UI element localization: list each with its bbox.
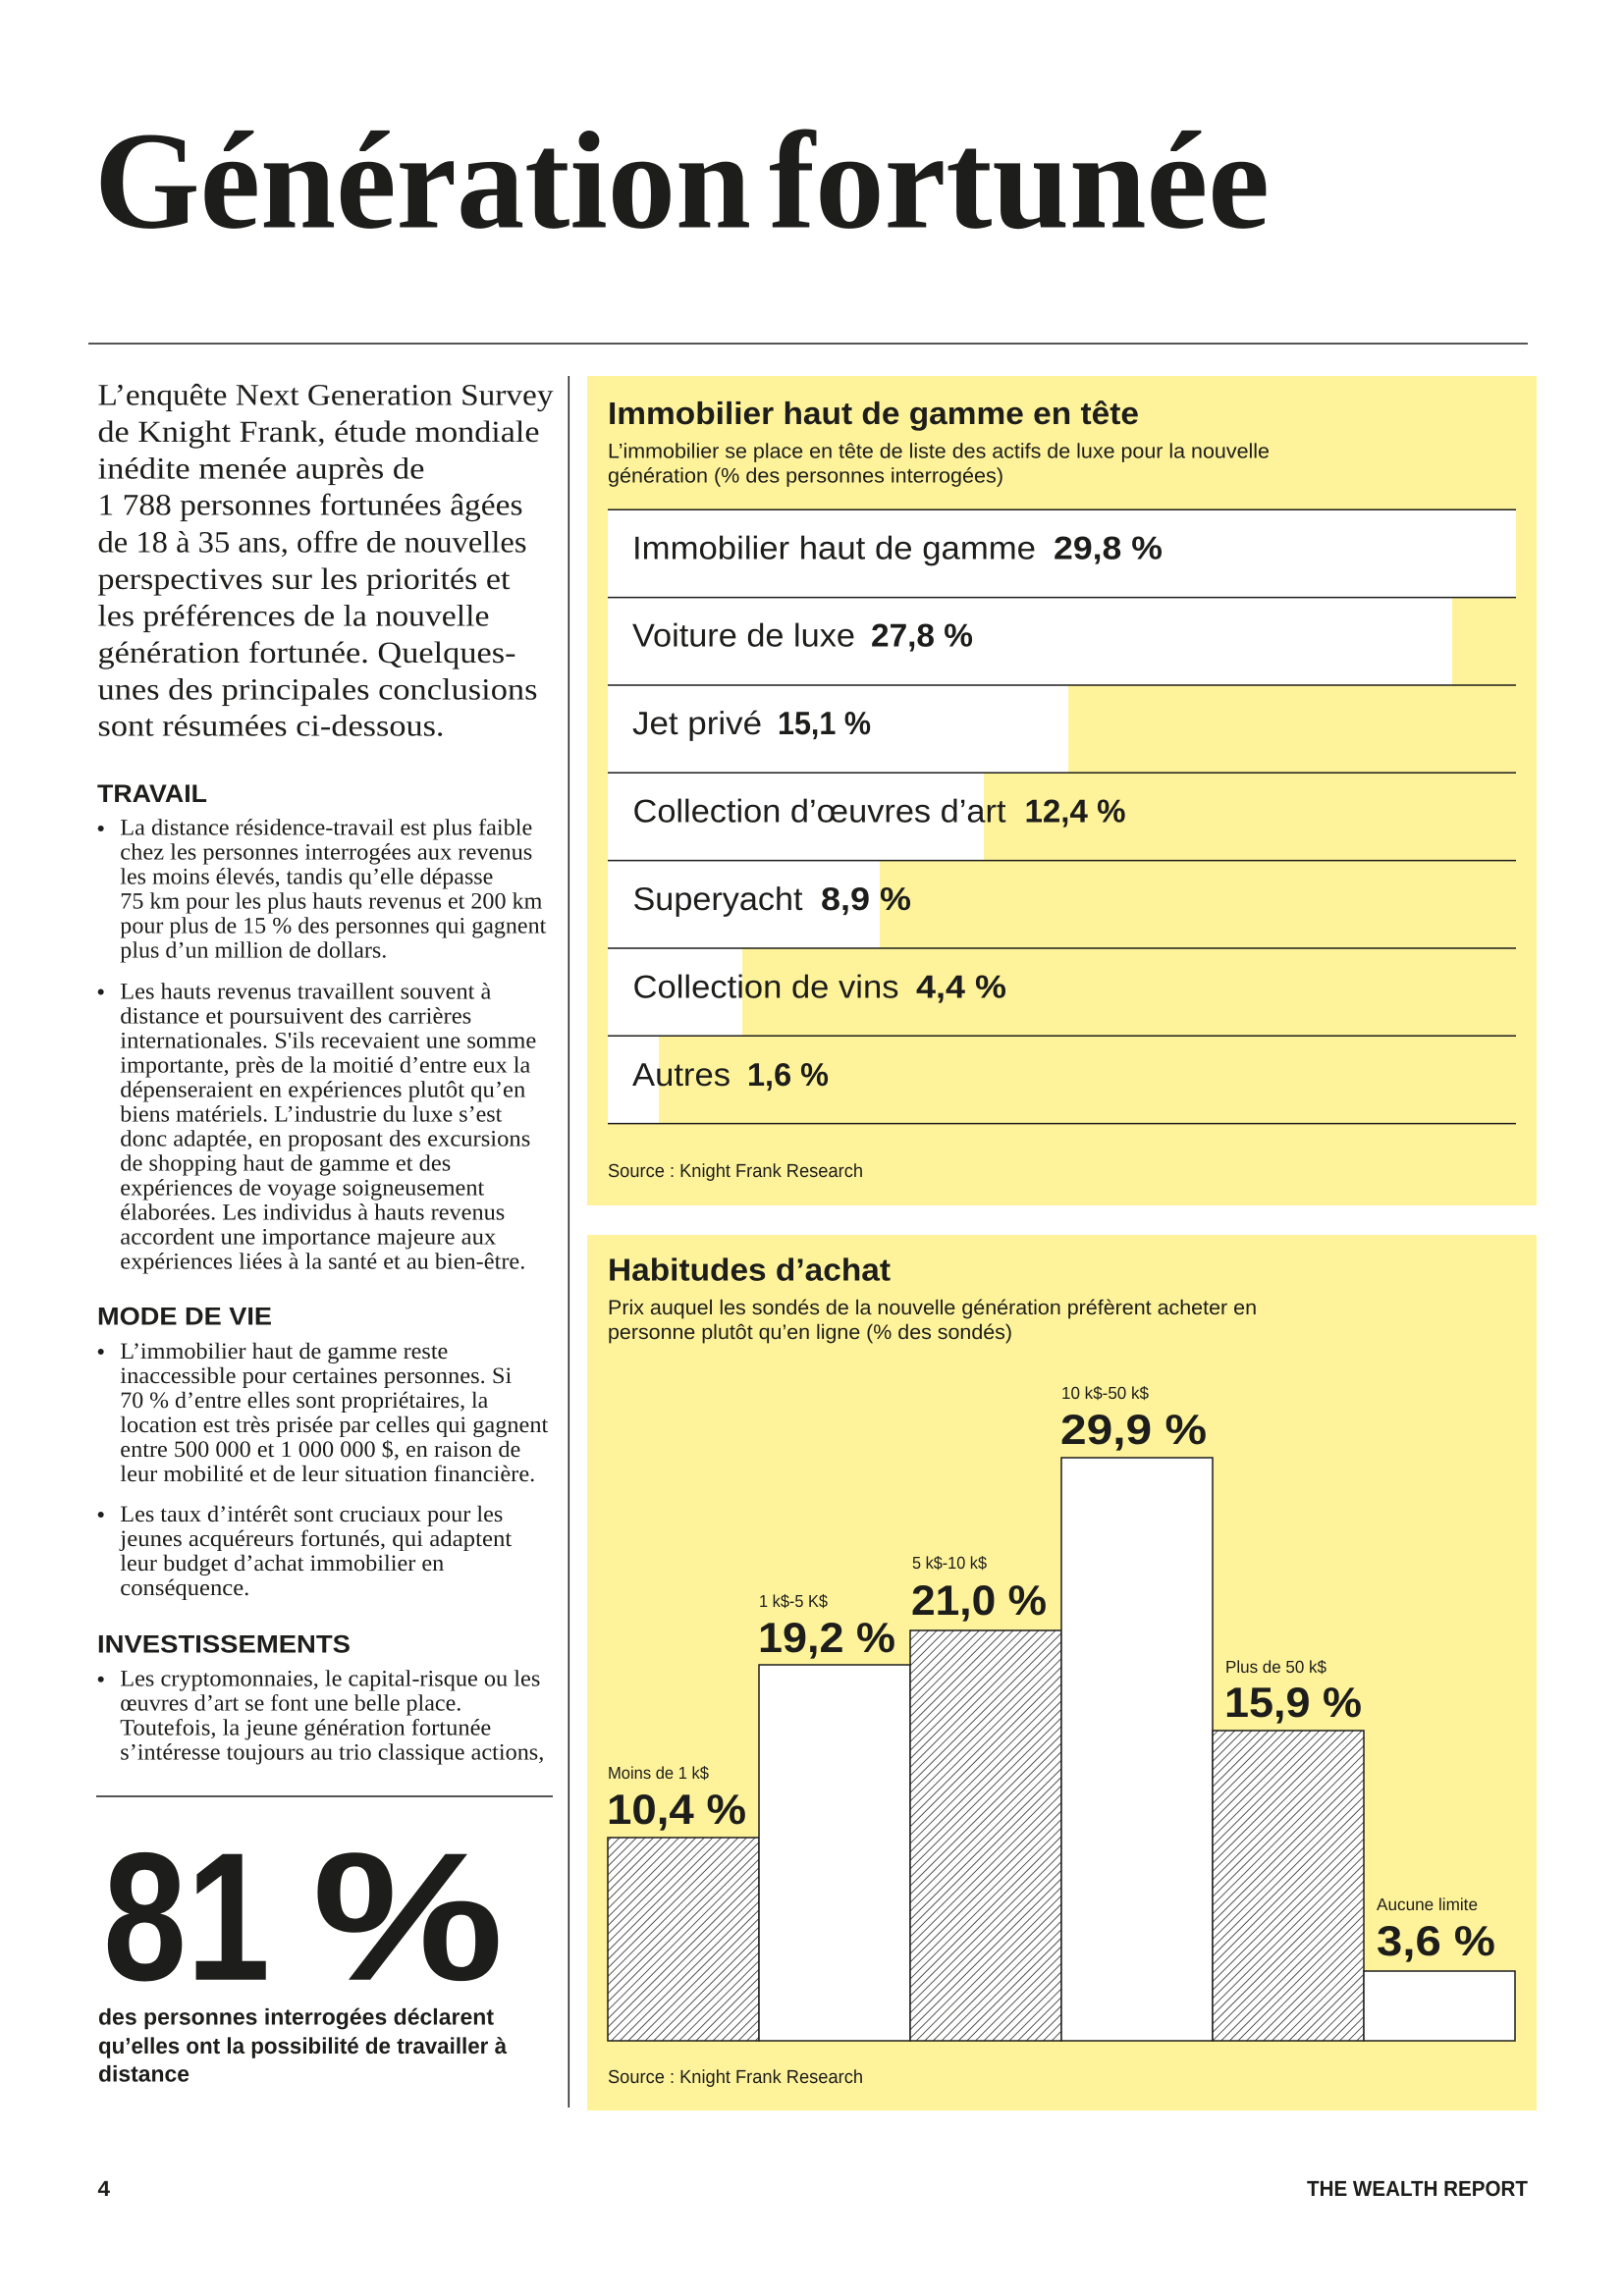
row: superyacht: Superyacht [632, 881, 803, 917]
bar: 5 k$-10 k$: 21,0 % [911, 1577, 1047, 1625]
bullet: hauts revenus: Les hauts revenus travaillent souvent à [120, 979, 492, 1004]
row: voiture de luxe: Voiture de luxe [632, 616, 855, 654]
bullet: hauts revenus: expériences de voyage soigneusement [120, 1175, 485, 1201]
bar: aucune limite: Aucune limite [1377, 1895, 1478, 1914]
bar: plus de 50 k$ [1213, 1657, 1364, 2041]
row: jet privé: Jet privé [632, 705, 762, 741]
bullet: hauts revenus: expériences liées à la santé et au bien-être. [120, 1249, 525, 1274]
bar: 5 k$-10 k$ [910, 1553, 1061, 2041]
row: collection de vins [632, 968, 1006, 1005]
bar: 5 k$-10 k$: 5 k$-10 k$ [912, 1553, 987, 1573]
bullet: cryptomonnaies: Les cryptomonnaies, le capital-risque ou les [120, 1666, 540, 1691]
bar: 1 k$-5 k$: 1 k$-5 K$ [759, 1591, 828, 1611]
horizontal bar chart [608, 509, 1516, 1124]
bullet: hauts revenus: accordent une importance majeure aux [120, 1224, 497, 1250]
intro paragraph [98, 378, 554, 742]
bar: 1 k$-5 k$ [758, 1591, 910, 2041]
bar: aucune limite: 3,6 % [1377, 1918, 1495, 1965]
title: Génération [94, 102, 751, 257]
stat caption: distance [98, 2061, 189, 2087]
stat caption: des personnes interrogées déclarent [98, 2004, 494, 2030]
bullet: cryptomonnaies [98, 1666, 544, 1765]
bar: plus de 50 k$: 15,9 % [1224, 1680, 1362, 1727]
panel subtitle: L’immobilier se place en tête de liste des actifs de luxe pour la nouvelle [608, 441, 1270, 463]
row: immobilier haut de gamme: Immobilier haut de gamme [632, 530, 1036, 565]
bullet: hauts revenus: internationales. S'ils recevaient une somme [120, 1028, 536, 1053]
bullet: distance résidence-travail: La distance résidence-travail est plus faible [120, 816, 532, 841]
bullet: taux d'intérêt: leur budget d’achat immobilier en [120, 1551, 445, 1576]
bar: 10 k$-50 k$: 29,9 % [1060, 1407, 1207, 1454]
bar: moins de 1 k$: 10,4 % [607, 1787, 746, 1834]
bullet: distance résidence-travail: pour plus de 15 % des personnes qui gagnent [120, 914, 547, 939]
bar: moins de 1 k$ [607, 1763, 759, 2041]
bullet: hauts revenus: biens matériels. L’industrie du luxe s’est [120, 1101, 503, 1127]
panel heading: Immobilier haut de gamme en tête [608, 396, 1139, 431]
source note: Source : Knight Frank Research [608, 1161, 863, 1182]
bullet: immobilier haut de gamme: entre 500 000 et 1 000 000 $, en raison de [120, 1437, 520, 1463]
row: autres: 1,6 % [747, 1056, 829, 1093]
bullet: distance résidence-travail: 75 km pour les plus hauts revenus et 200 km [120, 889, 542, 915]
panel: immobilier haut de gamme [587, 376, 1537, 1205]
heading: travail: TRAVAIL [97, 780, 207, 808]
intro paragraph: génération fortunée. Quelques- [98, 635, 516, 669]
panel subtitle: génération (% des personnes interrogées) [608, 465, 1003, 488]
bullet: immobilier haut de gamme: 70 % d’entre elles sont propriétaires, la [120, 1388, 489, 1414]
row: voiture de luxe: 27,8 % [871, 616, 973, 654]
row: jet privé: 15,1 % [778, 705, 871, 741]
intro paragraph: sont résumées ci-dessous. [98, 708, 445, 742]
title [94, 102, 1270, 257]
big stat: 81 %: 81 [103, 1816, 270, 2019]
bar: 10 k$-50 k$: 10 k$-50 k$ [1061, 1383, 1149, 1403]
bullet: immobilier haut de gamme: inaccessible pour certaines personnes. Si [120, 1363, 513, 1389]
heading: mode de vie: MODE DE VIE [97, 1303, 272, 1330]
bullet: immobilier haut de gamme: L’immobilier haut de gamme reste [120, 1339, 448, 1364]
panel subtitle [608, 1297, 1257, 1344]
intro paragraph: 1 788 personnes fortunées âgées [98, 488, 522, 522]
title: fortunée [769, 102, 1270, 257]
intro paragraph: les préférences de la nouvelle [98, 598, 489, 632]
intro paragraph: inédite menée auprès de [98, 451, 424, 485]
bullet: distance résidence-travail: les moins élevés, tandis qu’elle dépasse [120, 865, 493, 890]
bar: 10 k$-50 k$ [1060, 1383, 1213, 2041]
intro paragraph: de Knight Frank, étude mondiale [98, 414, 540, 449]
intro paragraph: unes des principales conclusions [98, 672, 538, 707]
bullet: taux d'intérêt: Les taux d’intérêt sont cruciaux pour les [120, 1502, 503, 1527]
heading: investissements: INVESTISSEMENTS [97, 1630, 351, 1658]
bullet: cryptomonnaies: œuvres d’art se font une belle place. [120, 1690, 461, 1716]
column chart [607, 1383, 1515, 2041]
bullet: hauts revenus: donc adaptée, en proposant des excursions [120, 1126, 530, 1151]
row: collection de vins: Collection de vins [632, 968, 899, 1005]
panel heading: Habitudes d’achat [608, 1252, 891, 1287]
row: superyacht [632, 881, 911, 917]
bullet: immobilier haut de gamme: leur mobilité et de leur situation financière. [120, 1462, 535, 1487]
panel subtitle: Prix auquel les sondés de la nouvelle génération préfèrent acheter en [608, 1297, 1257, 1319]
bar: moins de 1 k$: Moins de 1 k$ [608, 1763, 709, 1783]
bullet: hauts revenus: dépenseraient en expériences plutôt qu’en [120, 1077, 526, 1102]
intro paragraph: L’enquête Next Generation Survey [98, 378, 554, 412]
bullet: hauts revenus [98, 979, 536, 1274]
bullet: cryptomonnaies: Toutefois, la jeune génération fortunée [120, 1715, 491, 1740]
row: collection d'oeuvres d'art: 12,4 % [1025, 793, 1125, 828]
bullet: hauts revenus: élaborées. Les individus à hauts revenus [120, 1200, 505, 1225]
bullet: hauts revenus: de shopping haut de gamme et des [120, 1150, 451, 1176]
intro paragraph: de 18 à 35 ans, offre de nouvelles [98, 525, 526, 560]
bullet: distance résidence-travail: plus d’un million de dollars. [120, 938, 387, 964]
bullet: cryptomonnaies: s’intéresse toujours au trio classique actions, [120, 1739, 544, 1765]
row: immobilier haut de gamme: 29,8 % [1054, 530, 1163, 565]
big stat: 81 % [103, 1816, 504, 2019]
row: autres [632, 1056, 829, 1093]
big stat: 81 %: % [312, 1816, 504, 2019]
bullet: distance résidence-travail: chez les personnes interrogées aux revenus [120, 840, 532, 866]
footer: report name: THE WEALTH REPORT [1307, 2176, 1529, 2201]
bullet: taux d'intérêt [98, 1502, 513, 1601]
bullet: immobilier haut de gamme: location est très prisée par celles qui gagnent [120, 1413, 549, 1438]
bullet: taux d'intérêt: conséquence. [120, 1575, 249, 1601]
bullet: hauts revenus: importante, près de la moitié d’entre eux la [120, 1052, 531, 1078]
row: collection d'oeuvres d'art: Collection d’œuvres d’art [632, 793, 1005, 828]
row: autres: Autres [632, 1056, 731, 1093]
row: superyacht: 8,9 % [821, 881, 911, 917]
page number: 4 [98, 2176, 111, 2201]
bullet: taux d'intérêt: jeunes acquéreurs fortunés, qui adaptent [119, 1526, 513, 1552]
bullet: distance résidence-travail [98, 816, 547, 964]
bar: 1 k$-5 k$: 19,2 % [758, 1615, 895, 1662]
stat caption: qu’elles ont la possibilité de travailler à [98, 2033, 507, 2058]
row: collection de vins: 4,4 % [916, 968, 1006, 1005]
bullet: hauts revenus: distance et poursuivent des carrières [120, 1003, 471, 1029]
row: jet privé [632, 705, 871, 741]
panel subtitle: personne plutôt qu’en ligne (% des sondés) [608, 1321, 1012, 1344]
panel subtitle [608, 441, 1270, 488]
stat caption [98, 2004, 507, 2087]
intro paragraph: perspectives sur les priorités et [98, 561, 511, 596]
bar: aucune limite [1364, 1895, 1515, 2041]
row: voiture de luxe [632, 616, 973, 654]
bar: plus de 50 k$: Plus de 50 k$ [1225, 1657, 1326, 1677]
panel: habitudes d'achat [587, 1235, 1537, 2110]
source note: Source : Knight Frank Research [608, 2067, 863, 2088]
bullet: immobilier haut de gamme [98, 1339, 549, 1487]
